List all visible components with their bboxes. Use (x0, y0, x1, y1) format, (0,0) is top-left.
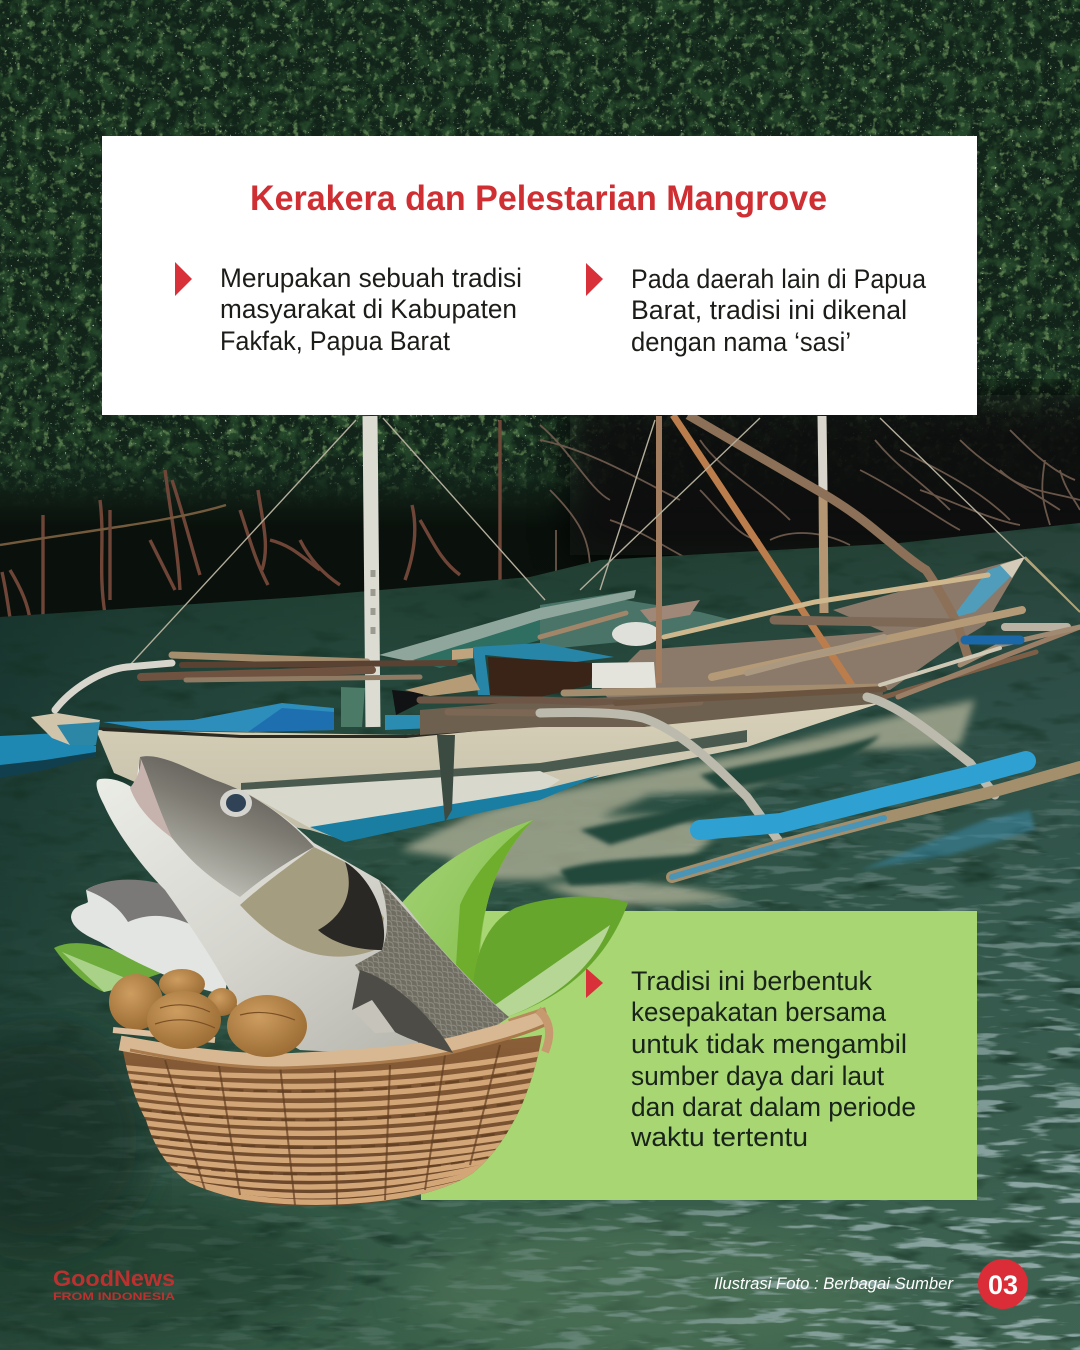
front fish (97, 756, 509, 1051)
text: description: waktu tertentu (630, 1122, 808, 1152)
rear outrigger float (0, 733, 96, 778)
text: left point (220, 263, 522, 356)
water (0, 520, 1080, 1350)
arrow: description (586, 968, 603, 998)
walnuts behind rim (109, 969, 237, 1030)
leaves (54, 820, 628, 1025)
text: left point: Fakfak, Papua Barat (220, 326, 450, 356)
text: right point (631, 264, 927, 357)
arrow: left point (175, 262, 192, 296)
arrow: right point (586, 263, 603, 296)
text: left point: Merupakan sebuah tradisi (220, 263, 522, 293)
fishing boat (0, 415, 1080, 877)
text: description (630, 966, 916, 1152)
text: description: kesepakatan bersama (631, 997, 887, 1027)
front outrigger floats (672, 761, 1080, 877)
mangrove roots (0, 420, 1080, 620)
masts and diagonal poles (130, 415, 1080, 727)
logo: GoodNews from Indonesia: GoodNews (53, 1266, 175, 1291)
text: left point: masyarakat di Kabupaten (220, 294, 517, 324)
walnuts in front (147, 991, 307, 1057)
page number: 03 (988, 1270, 1018, 1300)
page number (978, 1259, 1028, 1309)
mangrove foliage (0, 0, 1080, 640)
text: right point: dengan nama ‘sasi’ (631, 327, 851, 357)
text: description: untuk tidak mengambil (631, 1029, 907, 1059)
bamboo cross poles (141, 575, 1080, 713)
text: description: sumber daya dari laut (631, 1061, 884, 1091)
text: right point: Barat, tradisi ini dikenal (631, 295, 907, 325)
panel: title and intro points (102, 136, 977, 415)
deck planks (379, 557, 1025, 735)
text: right point: Pada daerah lain di Papua (631, 264, 927, 294)
curved outrigger arms (55, 663, 995, 840)
wicker basket (110, 1010, 550, 1206)
logo: GoodNews from Indonesia: FROM INDONESIA (53, 1291, 175, 1303)
deck cargo (103, 687, 434, 732)
panel: green tradition description (421, 911, 977, 1200)
back fish (71, 880, 230, 995)
text: description: dan darat dalam periode (631, 1092, 916, 1122)
pectoral fin (352, 970, 453, 1053)
illustration: basket with fish, leaves and walnuts (54, 756, 628, 1206)
boat hull (31, 703, 881, 842)
heading: Kerakera dan Pelestarian Mangrove (250, 179, 827, 218)
basket rim (113, 1010, 549, 1068)
text: description: Tradisi ini berbentuk (631, 966, 872, 996)
cabin (405, 643, 656, 697)
logo: GoodNews from Indonesia (53, 1266, 175, 1303)
photo credit: Ilustrasi Foto : Berbagai Sumber (714, 1274, 954, 1293)
